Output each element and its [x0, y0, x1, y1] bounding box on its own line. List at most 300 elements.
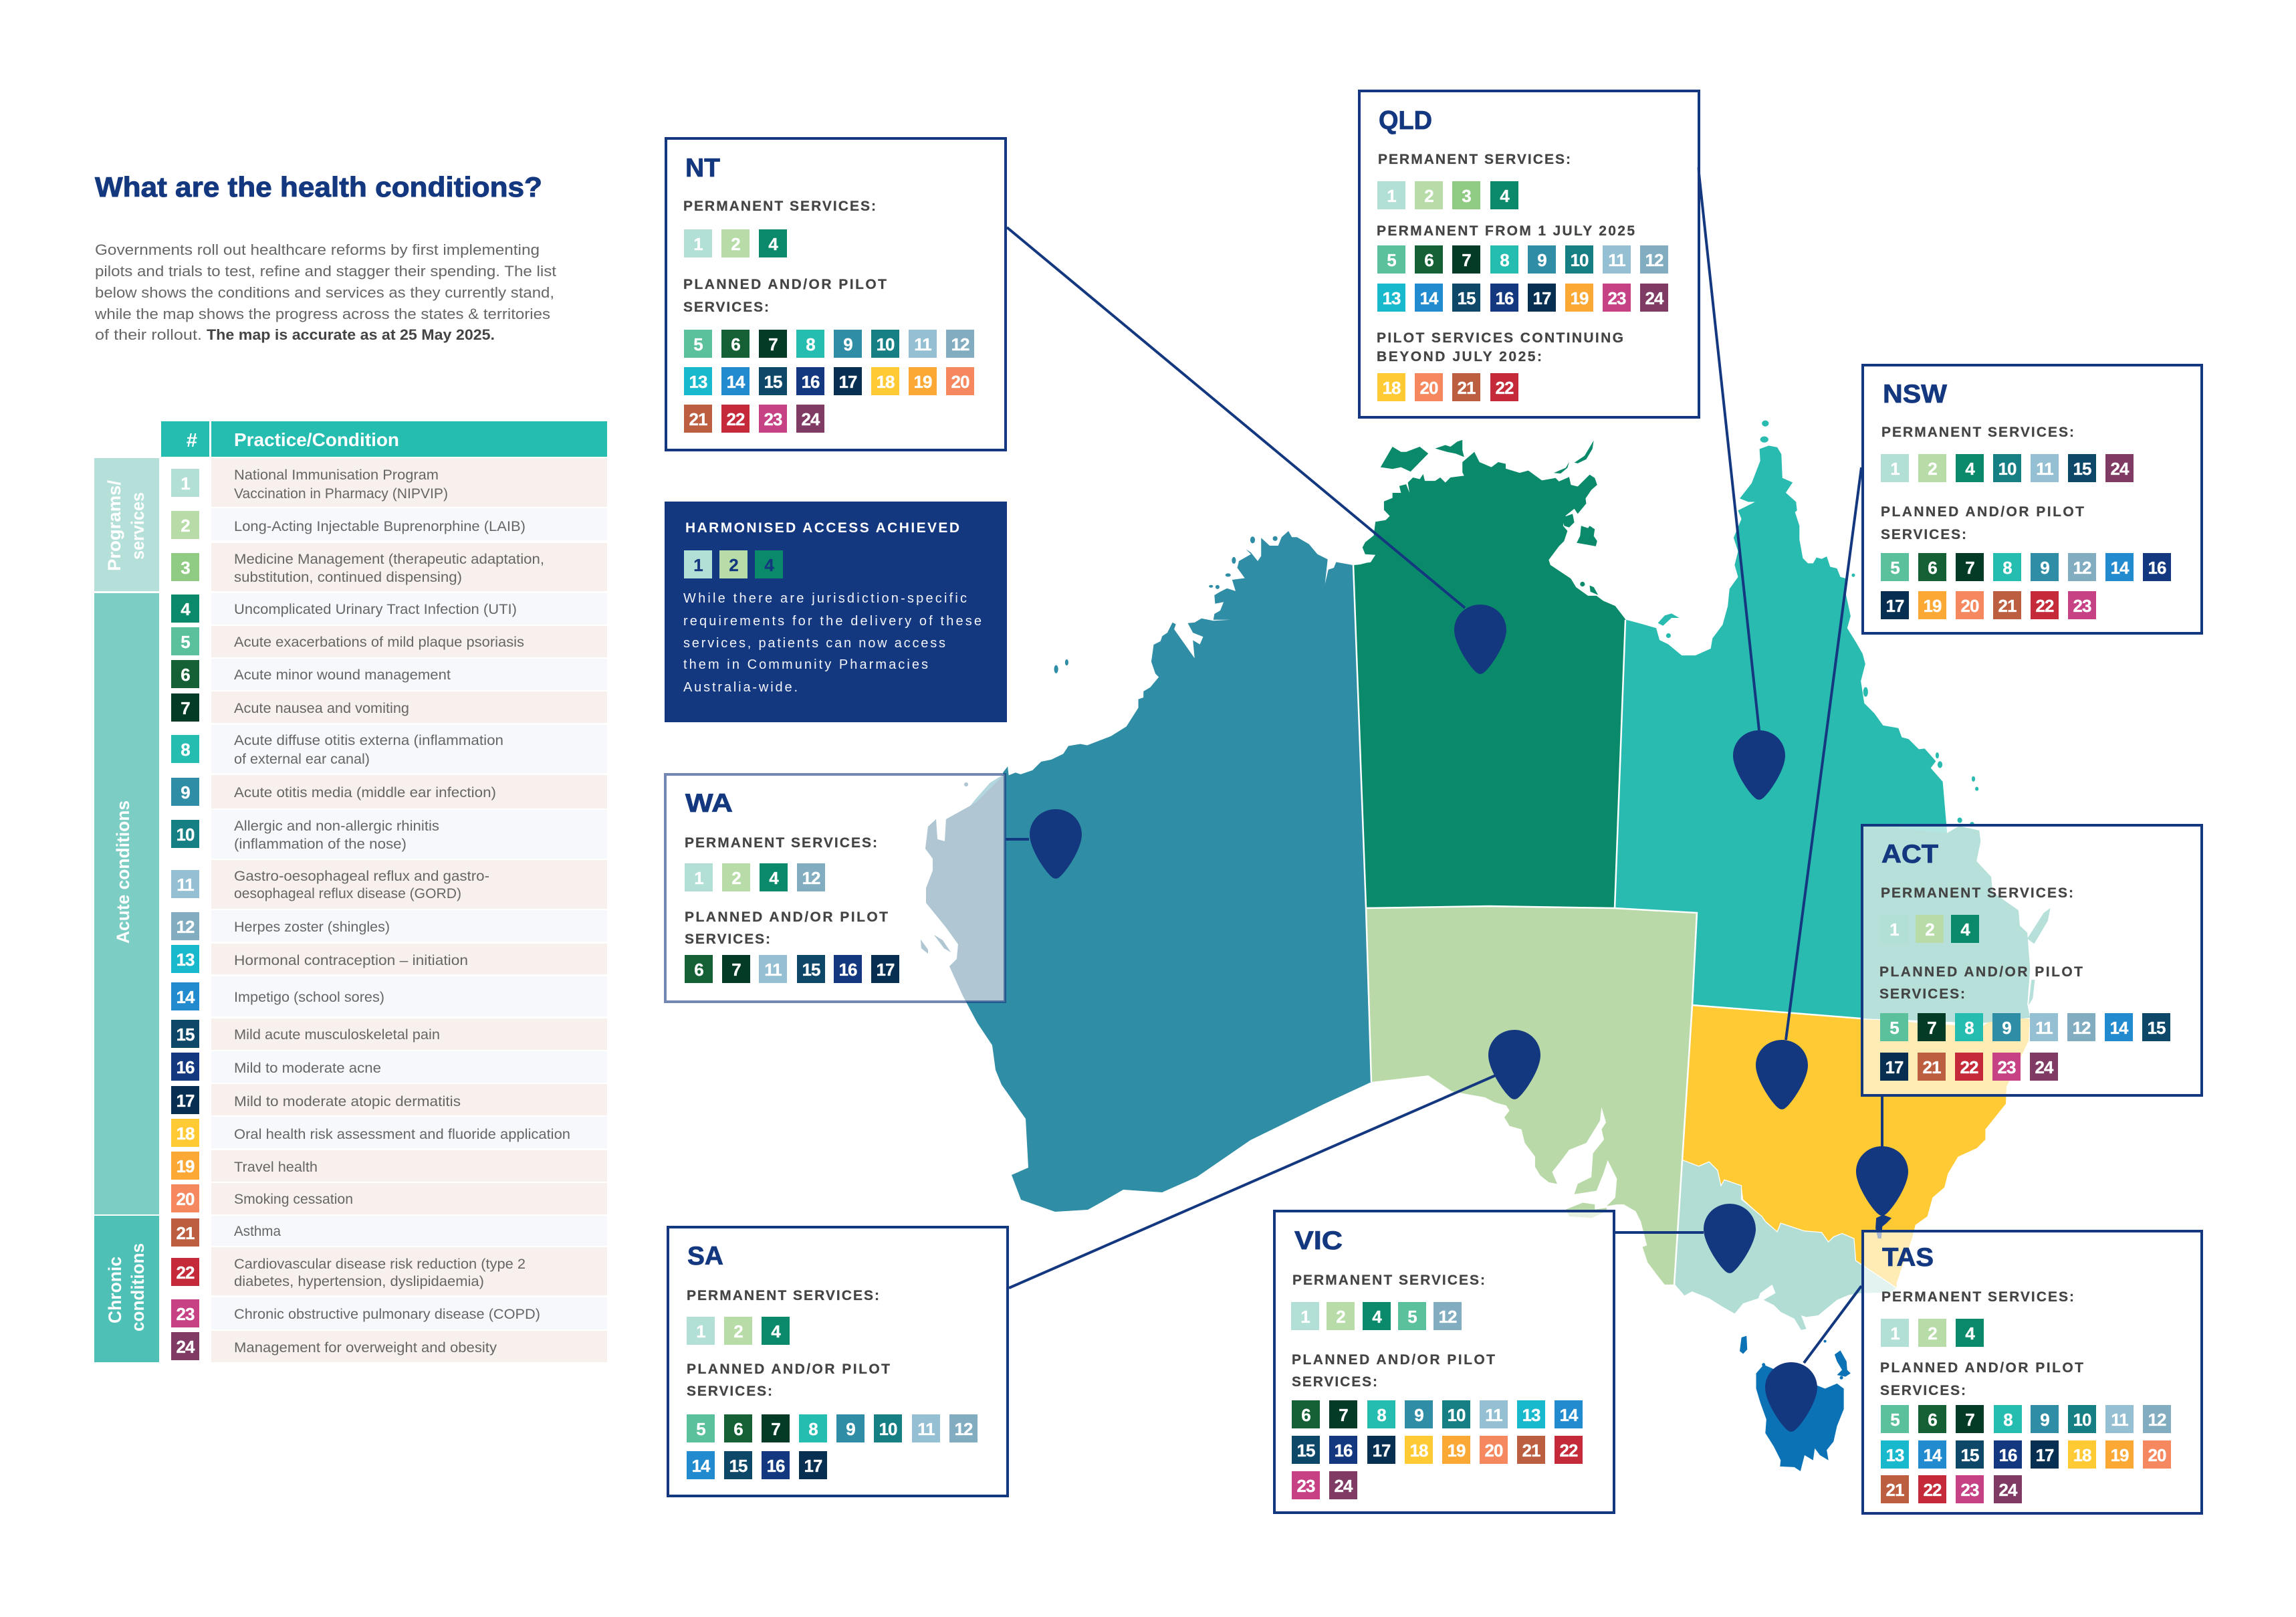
row 5: 5	[181, 632, 190, 652]
VIC planned services: 8	[1377, 1405, 1386, 1425]
row 22: 22	[177, 1263, 195, 1283]
TAS planned services: 5	[1890, 1410, 1900, 1430]
TAS planned services: 13	[1886, 1445, 1904, 1465]
row 20	[171, 1183, 607, 1214]
TAS planned services: 20	[2148, 1445, 2166, 1465]
NT planned services: 19	[914, 372, 932, 392]
TAS planned services: 18	[2073, 1445, 2091, 1465]
SA planned services: 14	[692, 1456, 711, 1476]
TAS planned services: 22	[1924, 1480, 1942, 1500]
NT planned services: 10	[877, 334, 895, 354]
ACT planned services: 8	[1964, 1018, 1974, 1038]
NSW planned services: 9	[2040, 558, 2049, 578]
ACT permanent services	[1880, 885, 2073, 943]
NSW planned services: PLANNED AND/OR PILOT	[1881, 504, 2084, 520]
row 14: 14	[177, 987, 195, 1007]
TAS planned services: 15	[1961, 1445, 1979, 1465]
VIC planned services	[1292, 1352, 1583, 1499]
ACT planned services	[1879, 964, 2170, 1081]
VIC planned services: 22	[1560, 1440, 1578, 1461]
NT planned services: 23	[764, 409, 782, 429]
row 18: Oral health risk assessment and fluoride application	[234, 1127, 570, 1142]
NT planned services	[683, 277, 974, 433]
NSW permanent services: 11	[2036, 459, 2053, 479]
panel: QLD	[1359, 91, 1699, 417]
row 2	[171, 508, 607, 540]
ACT permanent services: 4	[1960, 920, 1970, 940]
SA planned services: 17	[804, 1456, 822, 1476]
row 24: Management for overweight and obesity	[234, 1340, 497, 1356]
QLD permanent from July 2025: 24	[1645, 288, 1664, 308]
group: acute conditions: Acute conditions	[113, 800, 133, 944]
row 9	[171, 775, 607, 808]
row 15: Mild acute musculoskeletal pain	[234, 1027, 440, 1043]
SA permanent services: 1	[696, 1321, 705, 1341]
map of Australia	[921, 421, 2050, 1471]
row 15	[171, 1018, 607, 1050]
TAS planned services: SERVICES:	[1880, 1383, 1966, 1398]
SA planned services: 12	[955, 1419, 973, 1439]
TAS planned services: 17	[2036, 1445, 2054, 1465]
row 17	[171, 1084, 607, 1115]
QLD permanent services	[1377, 152, 1571, 209]
title: What are the health conditions?	[95, 171, 542, 203]
WA permanent services: 2	[731, 868, 741, 888]
row 11: 11	[177, 875, 194, 895]
territory: NT	[1353, 440, 1625, 909]
ACT planned services: 12	[2073, 1018, 2091, 1038]
group: acute conditions	[94, 593, 159, 1214]
NSW planned services: 19	[1924, 596, 1942, 616]
TAS planned services: 6	[1928, 1410, 1937, 1430]
QLD pilot services	[1377, 330, 1623, 401]
row 14	[171, 976, 607, 1016]
row 3: 3	[181, 558, 190, 578]
SA planned services: 16	[767, 1456, 785, 1476]
row 10: (inflammation of the nose)	[234, 837, 407, 852]
QLD permanent services: 4	[1500, 186, 1510, 206]
row 21: 21	[177, 1223, 195, 1243]
table header: Practice/Condition	[234, 429, 399, 450]
SA permanent services: 4	[771, 1321, 781, 1341]
row 12: 12	[177, 917, 195, 937]
group: programs/services: Programs/	[104, 480, 124, 571]
TAS heading: TAS	[1882, 1243, 1934, 1272]
row 11: Gastro-oesophageal reflux and gastro-	[234, 869, 489, 884]
NT permanent services	[683, 199, 876, 257]
pin: NT	[1454, 605, 1506, 674]
QLD heading: QLD	[1379, 106, 1432, 135]
QLD permanent from July 2025: 23	[1608, 288, 1626, 308]
row 23	[171, 1297, 607, 1329]
NT planned services: 13	[689, 372, 707, 392]
row 11: oesophageal reflux disease (GORD)	[234, 886, 461, 901]
ACT permanent services: 1	[1889, 920, 1899, 940]
row 14: Impetigo (school sores)	[234, 990, 384, 1005]
WA planned services: 7	[731, 960, 741, 980]
panel: NT	[666, 138, 1006, 450]
TAS permanent services: 1	[1890, 1323, 1900, 1343]
NT planned services: 9	[843, 334, 852, 354]
WA permanent services	[685, 835, 877, 891]
ACT planned services: 7	[1927, 1018, 1936, 1038]
row 23: 23	[177, 1304, 195, 1324]
pin: TAS	[1765, 1362, 1817, 1432]
intro paragraph: below shows the conditions and services as they currently stand,	[95, 284, 554, 301]
SA planned services: 15	[729, 1456, 748, 1476]
row 11	[171, 860, 607, 909]
QLD pilot services: PILOT SERVICES CONTINUING	[1377, 330, 1623, 346]
NT permanent services: 4	[768, 234, 778, 254]
row 21	[171, 1216, 607, 1247]
pin: VIC	[1704, 1204, 1756, 1273]
NT planned services: 17	[839, 372, 857, 392]
harmonised text: services, patients can now access	[683, 636, 945, 651]
VIC permanent services: 4	[1372, 1307, 1382, 1327]
pin: ACT	[1856, 1146, 1908, 1216]
VIC permanent services: 1	[1300, 1307, 1310, 1327]
NSW permanent services: 24	[2111, 459, 2130, 479]
state: SA	[1366, 906, 1697, 1285]
SA planned services: 5	[696, 1419, 705, 1439]
harmonised badges: 2	[729, 555, 738, 575]
QLD permanent from July 2025: PERMANENT FROM 1 JULY 2025	[1377, 223, 1635, 239]
table header: #	[187, 430, 197, 451]
TAS permanent services: PERMANENT SERVICES:	[1881, 1289, 2074, 1305]
NSW planned services: 6	[1928, 558, 1937, 578]
SA heading: SA	[687, 1242, 723, 1271]
row 18: 18	[177, 1123, 195, 1144]
NT planned services: 7	[768, 334, 778, 354]
NT planned services: 12	[951, 334, 969, 354]
state: QLD	[1615, 421, 2050, 1023]
NSW permanent services: 1	[1890, 459, 1900, 479]
pin: WA	[1030, 809, 1082, 879]
NSW permanent services	[1881, 425, 2134, 482]
table header	[161, 421, 607, 457]
harmonised badges: 1	[693, 555, 703, 575]
NT planned services: 20	[951, 372, 969, 392]
QLD permanent from July 2025: 15	[1458, 288, 1476, 308]
QLD permanent from July 2025: 5	[1387, 250, 1396, 270]
row 12: Herpes zoster (shingles)	[234, 920, 390, 935]
QLD permanent from July 2025: 12	[1645, 250, 1663, 270]
WA planned services: 16	[839, 960, 857, 980]
NSW planned services: 17	[1886, 596, 1904, 616]
NT planned services: 5	[693, 334, 703, 354]
row 24: 24	[177, 1337, 195, 1357]
QLD permanent services: 2	[1424, 186, 1433, 206]
SA planned services: SERVICES:	[687, 1384, 772, 1399]
VIC planned services: 11	[1485, 1405, 1502, 1425]
NT planned services: 24	[802, 409, 820, 429]
WA planned services	[685, 909, 899, 983]
row 17: 17	[177, 1091, 195, 1111]
VIC planned services: 19	[1448, 1440, 1466, 1461]
NT planned services: 15	[764, 372, 782, 392]
VIC planned services: 18	[1410, 1440, 1428, 1461]
row 4	[171, 593, 607, 625]
WA permanent services: 4	[769, 868, 779, 888]
row 16: 16	[177, 1057, 195, 1077]
SA planned services: 11	[917, 1419, 935, 1439]
NSW planned services: 16	[2148, 558, 2166, 578]
row 19: Travel health	[234, 1160, 318, 1175]
VIC planned services: 10	[1448, 1405, 1466, 1425]
NSW planned services: 20	[1961, 596, 1979, 616]
NT planned services: SERVICES:	[683, 300, 769, 315]
NSW planned services	[1881, 504, 2171, 619]
QLD permanent from July 2025: 17	[1533, 288, 1551, 308]
WA planned services: 11	[764, 960, 782, 980]
QLD permanent from July 2025: 6	[1424, 250, 1433, 270]
panel: NSW	[1863, 365, 2202, 633]
ACT planned services: 22	[1960, 1057, 1978, 1077]
SA planned services: 6	[733, 1419, 743, 1439]
row 10: Allergic and non-allergic rhinitis	[234, 819, 439, 834]
QLD permanent from July 2025: 7	[1462, 250, 1471, 270]
WA planned services: 17	[877, 960, 895, 980]
NT permanent services: 1	[693, 234, 703, 254]
QLD permanent services: 1	[1387, 186, 1396, 206]
row 6: 6	[181, 665, 190, 685]
row 24	[171, 1331, 607, 1362]
row 19: 19	[177, 1156, 195, 1176]
group: chronic conditions	[94, 1216, 159, 1362]
QLD permanent from July 2025: 10	[1571, 250, 1589, 270]
WA planned services: 15	[802, 960, 820, 980]
VIC permanent services: 2	[1336, 1307, 1345, 1327]
VIC planned services: 7	[1339, 1405, 1348, 1425]
TAS planned services: 24	[1999, 1480, 2018, 1500]
NT planned services: 6	[731, 334, 740, 354]
QLD permanent from July 2025	[1377, 223, 1668, 312]
VIC heading: VIC	[1294, 1226, 1343, 1255]
NSW permanent services: 10	[1998, 459, 2017, 479]
VIC permanent services: PERMANENT SERVICES:	[1292, 1273, 1485, 1288]
connector lines	[1006, 167, 1882, 1363]
SA planned services: PLANNED AND/OR PILOT	[687, 1362, 890, 1377]
TAS permanent services	[1881, 1289, 2074, 1347]
intro paragraph: while the map shows the progress across the states & territories	[94, 306, 550, 322]
NSW planned services: 5	[1890, 558, 1900, 578]
VIC permanent services: 12	[1439, 1307, 1457, 1327]
row 13: 13	[177, 950, 195, 970]
NSW planned services: 21	[1998, 596, 2017, 616]
state: VIC	[1675, 1160, 1897, 1330]
panel: SA	[668, 1227, 1008, 1496]
VIC planned services: 24	[1335, 1476, 1353, 1496]
harmonised text: While there are jurisdiction-specific	[683, 591, 967, 606]
panel: harmonised access achieved	[665, 502, 1007, 722]
pin: NSW	[1756, 1040, 1808, 1109]
harmonised badges	[684, 550, 783, 578]
panel: WA	[665, 774, 1010, 1023]
QLD permanent from July 2025: 19	[1571, 288, 1589, 308]
row 1	[171, 458, 607, 507]
SA planned services: 9	[846, 1419, 855, 1439]
row 21: Asthma	[234, 1224, 281, 1239]
group: programs/services	[94, 458, 159, 591]
VIC planned services: 15	[1297, 1440, 1315, 1461]
WA planned services: 6	[694, 960, 703, 980]
TAS planned services: 7	[1965, 1410, 1974, 1430]
QLD pilot services: 18	[1383, 378, 1401, 398]
row 13	[171, 944, 607, 974]
NT planned services: 8	[806, 334, 815, 354]
row 3	[171, 543, 607, 591]
ACT planned services: 21	[1923, 1057, 1941, 1077]
VIC planned services: 21	[1522, 1440, 1540, 1461]
ACT planned services: 11	[2035, 1018, 2053, 1038]
NT planned services: 16	[802, 372, 820, 392]
VIC planned services: PLANNED AND/OR PILOT	[1292, 1352, 1495, 1368]
QLD permanent services: 3	[1462, 186, 1471, 206]
row 8	[171, 725, 607, 773]
NSW planned services: 12	[2073, 558, 2091, 578]
NT planned services: 14	[727, 372, 745, 392]
TAS planned services: 11	[2111, 1410, 2128, 1430]
ACT planned services: 15	[2148, 1018, 2166, 1038]
row 7: Acute nausea and vomiting	[234, 701, 409, 716]
group: chronic conditions: conditions	[128, 1243, 148, 1331]
ACT planned services: PLANNED AND/OR PILOT	[1879, 964, 2083, 980]
VIC planned services: 14	[1560, 1405, 1579, 1425]
SA permanent services	[687, 1288, 879, 1345]
TAS planned services: 23	[1961, 1480, 1979, 1500]
VIC planned services: 17	[1373, 1440, 1391, 1461]
VIC planned services: 20	[1485, 1440, 1503, 1461]
QLD permanent services: PERMANENT SERVICES:	[1378, 152, 1571, 167]
row 23: Chronic obstructive pulmonary disease (COPD)	[234, 1307, 540, 1322]
panel: VIC	[1274, 1211, 1614, 1513]
ACT permanent services: PERMANENT SERVICES:	[1881, 885, 2073, 901]
row 6	[171, 659, 607, 690]
ACT planned services: 23	[1998, 1057, 2016, 1077]
row 15: 15	[177, 1025, 195, 1045]
ACT heading: ACT	[1881, 840, 1938, 869]
TAS permanent services: 2	[1928, 1323, 1937, 1343]
map pins	[1030, 605, 1908, 1432]
SA planned services: 10	[879, 1419, 897, 1439]
VIC planned services: 9	[1414, 1405, 1423, 1425]
QLD pilot services: 22	[1496, 378, 1514, 398]
conditions table	[94, 421, 607, 1362]
row 10: 10	[177, 825, 195, 845]
row 9: 9	[181, 782, 190, 802]
QLD permanent from July 2025: 8	[1500, 250, 1509, 270]
SA permanent services: PERMANENT SERVICES:	[687, 1288, 879, 1303]
NSW planned services: 8	[2002, 558, 2012, 578]
row 8: Acute diffuse otitis externa (inflammation	[234, 733, 503, 748]
territory: ACT	[1875, 1214, 1891, 1238]
row 16	[171, 1051, 607, 1083]
ACT planned services: 9	[2002, 1018, 2011, 1038]
NT planned services: 21	[689, 409, 707, 429]
row 3: substitution, continued dispensing)	[234, 570, 462, 585]
NSW heading: NSW	[1883, 380, 1947, 409]
harmonised heading: HARMONISED ACCESS ACHIEVED	[685, 520, 959, 536]
state: WA	[921, 531, 1371, 1212]
harmonised text: them in Community Pharmacies	[683, 657, 928, 672]
row 6: Acute minor wound management	[234, 667, 451, 683]
ACT permanent services: 2	[1925, 920, 1934, 940]
row 7: 7	[181, 698, 190, 718]
ACT planned services: SERVICES:	[1879, 986, 1965, 1002]
NT permanent services: 2	[731, 234, 740, 254]
row 22: Cardiovascular disease risk reduction (type 2	[234, 1257, 526, 1272]
TAS planned services: 12	[2148, 1410, 2166, 1430]
row 1: 1	[181, 473, 190, 494]
QLD pilot services: BEYOND JULY 2025:	[1377, 349, 1542, 364]
NSW permanent services: PERMANENT SERVICES:	[1881, 425, 2074, 440]
harmonised badges: 4	[764, 555, 774, 575]
WA permanent services: PERMANENT SERVICES:	[685, 835, 877, 851]
SA planned services: 7	[771, 1419, 780, 1439]
TAS planned services: 16	[1999, 1445, 2017, 1465]
ACT planned services: 17	[1885, 1057, 1904, 1077]
TAS permanent services: 4	[1965, 1323, 1975, 1343]
TAS planned services: 14	[1924, 1445, 1942, 1465]
NSW permanent services: 15	[2073, 459, 2091, 479]
row 5	[171, 626, 607, 657]
harmonised text: Australia-wide.	[683, 680, 798, 695]
row 22	[171, 1247, 607, 1295]
NSW planned services: 14	[2111, 558, 2130, 578]
row 1: Vaccination in Pharmacy (NIPVIP)	[234, 486, 448, 502]
panel: TAS	[1863, 1231, 2202, 1513]
NT permanent services: PERMANENT SERVICES:	[683, 199, 876, 214]
VIC planned services: 23	[1297, 1476, 1315, 1496]
NT planned services: PLANNED AND/OR PILOT	[683, 277, 887, 292]
QLD permanent from July 2025: 14	[1420, 288, 1439, 308]
intro paragraph: Governments roll out healthcare reforms by first implementing	[95, 241, 540, 258]
WA planned services: PLANNED AND/OR PILOT	[685, 909, 888, 925]
pin: QLD	[1733, 730, 1785, 800]
intro paragraph: pilots and trials to test, refine and stagger their spending. The list	[95, 263, 556, 280]
NT heading: NT	[685, 154, 720, 183]
row 10	[171, 810, 607, 859]
intro paragraph: of their rollout.	[95, 326, 202, 343]
NSW permanent services: 2	[1928, 459, 1937, 479]
row 8: of external ear canal)	[234, 752, 370, 767]
row 9: Acute otitis media (middle ear infection)	[234, 785, 496, 800]
VIC planned services: 6	[1301, 1405, 1310, 1425]
TAS planned services	[1880, 1360, 2171, 1503]
NT planned services: 18	[877, 372, 895, 392]
row 20: Smoking cessation	[234, 1192, 353, 1207]
TAS planned services: 10	[2073, 1410, 2091, 1430]
state: NSW	[1682, 1005, 2030, 1288]
row 17: Mild to moderate atopic dermatitis	[234, 1094, 461, 1109]
row 3: Medicine Management (therapeutic adaptation,	[234, 552, 544, 567]
row 19	[171, 1150, 607, 1182]
NT planned services: 11	[914, 334, 931, 354]
row 2: Long-Acting Injectable Buprenorphine (LAIB)	[234, 519, 526, 534]
QLD permanent from July 2025: 16	[1496, 288, 1514, 308]
NSW permanent services: 4	[1965, 459, 1975, 479]
WA planned services: SERVICES:	[685, 932, 770, 947]
intro paragraph: The map is accurate as at 25 May 2025.	[207, 326, 495, 343]
TAS planned services: 8	[2003, 1410, 2013, 1430]
row 13: Hormonal contraception – initiation	[234, 953, 468, 968]
TAS planned services: 19	[2111, 1445, 2129, 1465]
SA permanent services: 2	[733, 1321, 743, 1341]
VIC planned services: 16	[1335, 1440, 1353, 1461]
WA permanent services: 12	[802, 868, 820, 888]
WA heading: WA	[685, 789, 733, 818]
intro paragraph	[94, 241, 556, 343]
